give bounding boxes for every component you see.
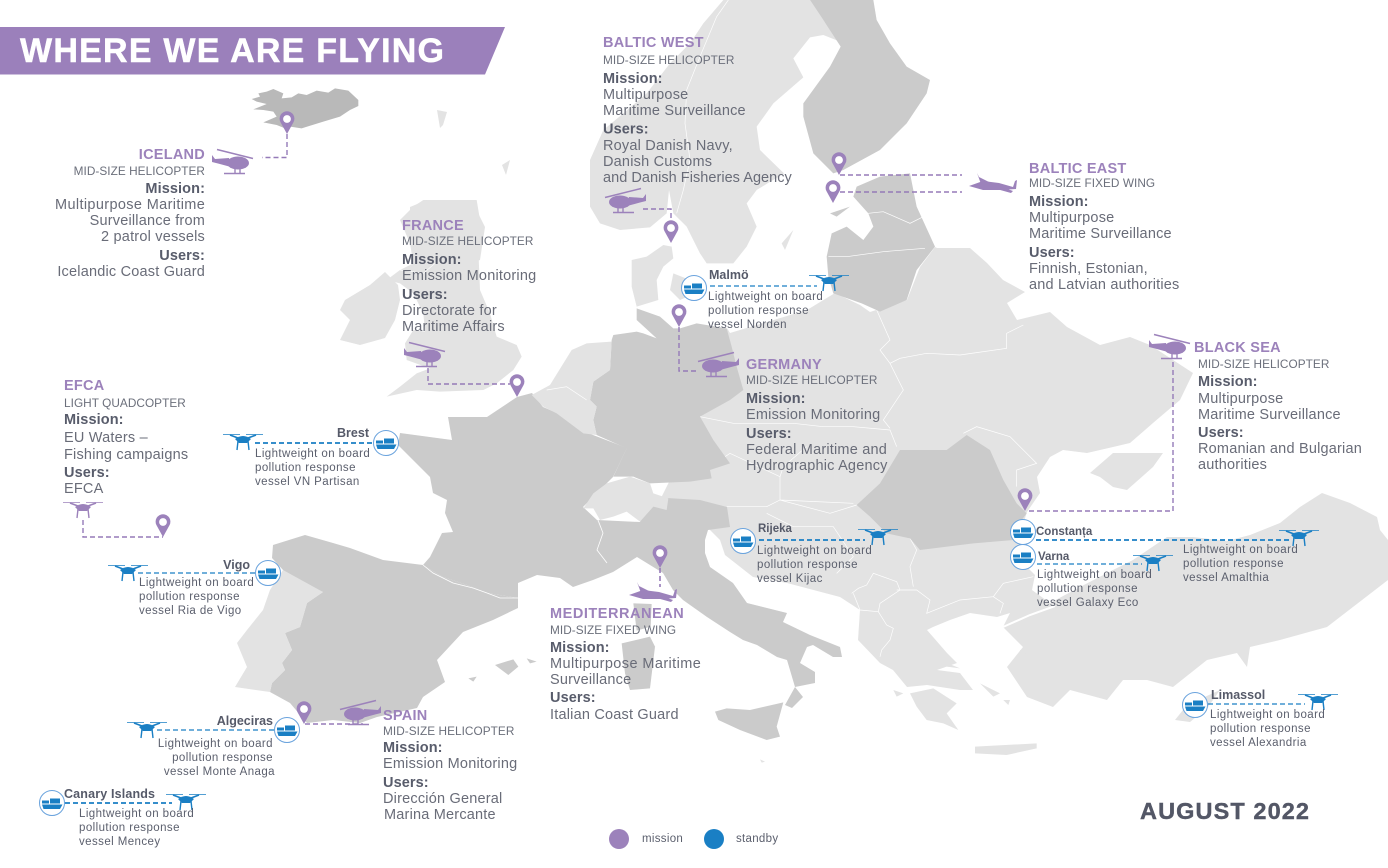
standby: Vigo: pollution response (139, 591, 240, 603)
location pins (156, 111, 1032, 724)
standby: Limassol (1210, 688, 1325, 749)
standby: Brest: Brest (337, 426, 370, 440)
panel: Germany: Users: (746, 426, 792, 442)
panel: Spain: MID-SIZE HELICOPTER (383, 724, 514, 738)
panel: Black Sea: authorities (1198, 457, 1267, 473)
map: Iceland (252, 88, 358, 128)
panel: Baltic West: Mission: (603, 71, 663, 87)
panel: Black Sea: Mission: (1198, 374, 1258, 390)
panel: Germany: GERMANY (746, 357, 822, 373)
panel: Baltic West: MID-SIZE HELICOPTER (603, 53, 734, 67)
panel: Spain (383, 708, 517, 823)
panel: EFCA: Users: (64, 465, 110, 481)
standby: Varna (1037, 551, 1152, 609)
standby: Constanța (1036, 526, 1298, 584)
panel: Germany: Hydrographic Agency (746, 458, 888, 474)
panel: Germany: Emission Monitoring (746, 407, 880, 423)
vessel icons (40, 276, 1208, 816)
panel: Baltic East: Mission: (1029, 194, 1089, 210)
panel: Mediterranean (550, 606, 701, 723)
standby: Rijeka: Rijeka (758, 523, 792, 535)
standby: Canary Islands: vessel Mencey (79, 836, 161, 848)
panel: Baltic West: Royal Danish Navy, (603, 138, 733, 154)
panel: France: Directorate for (402, 303, 497, 319)
panel: EFCA: Mission: (64, 412, 124, 428)
panel: Baltic East (1029, 161, 1180, 293)
panel: Iceland: Users: (159, 248, 205, 264)
standby: Canary Islands: pollution response (79, 822, 180, 834)
panel: Mediterranean: MID-SIZE FIXED WING (550, 623, 676, 637)
standby: Limassol: pollution response (1210, 723, 1311, 735)
standby: Brest: vessel VN Partisan (255, 476, 360, 488)
panel: France: MID-SIZE HELICOPTER (402, 234, 533, 248)
panel: Mediterranean: Mission: (550, 640, 610, 656)
panel: Black Sea (1194, 340, 1362, 473)
panel: Baltic West: Users: (603, 122, 649, 138)
standby: Malmö: pollution response (708, 305, 809, 317)
standby: Algeciras: vessel Monte Anaga (164, 766, 275, 778)
panel: Iceland: Surveillance from (90, 213, 205, 229)
panel: France: Mission: (402, 252, 462, 268)
standby: Constanța: vessel Amalthia (1183, 572, 1269, 584)
standby: Rijeka: vessel Kijac (757, 573, 823, 585)
panel: Baltic West: Danish Customs (603, 154, 712, 170)
legend: mission (642, 833, 683, 845)
panel: EFCA: Fishing campaigns (64, 447, 188, 463)
panel: Baltic West: BALTIC WEST (603, 35, 704, 51)
panel: Mediterranean: MEDITERRANEAN (550, 606, 684, 622)
panel: France (402, 218, 536, 335)
standby: Canary Islands (64, 787, 194, 848)
panel: Baltic East: MID-SIZE FIXED WING (1029, 176, 1155, 190)
standby: Limassol: vessel Alexandria (1210, 737, 1307, 749)
standby: Vigo (139, 558, 254, 617)
standby: Brest (255, 426, 370, 488)
panel: Iceland (55, 147, 205, 280)
standby: Varna: vessel Galaxy Eco (1037, 597, 1139, 609)
panel: Germany: Mission: (746, 391, 806, 407)
panel: Baltic East: Finnish, Estonian, (1029, 261, 1148, 277)
standby: Varna: Varna (1038, 551, 1070, 563)
legend (609, 829, 778, 849)
panel: EFCA (64, 378, 188, 497)
panel: Black Sea: Users: (1198, 425, 1244, 441)
dashed connector lines (65, 134, 1305, 803)
panel: Mediterranean: Multipurpose Maritime (550, 656, 701, 672)
standby: Constanța: Constanța (1036, 526, 1093, 538)
panel: EFCA: EFCA (64, 481, 104, 497)
standby: Rijeka: Lightweight on board (757, 545, 872, 557)
panel: France: Emission Monitoring (402, 268, 536, 284)
panel: Baltic East: BALTIC EAST (1029, 161, 1127, 177)
panel: France: Maritime Affairs (402, 319, 505, 335)
panel: EFCA: EFCA (64, 378, 105, 394)
map of Europe (235, 0, 1388, 763)
map: non-highlighted countries (340, 0, 1388, 763)
standby: Malmö (708, 268, 823, 331)
panel: Spain: SPAIN (383, 708, 428, 724)
standby: Brest: pollution response (255, 462, 356, 474)
title banner (0, 27, 505, 74)
panel: Mediterranean: Italian Coast Guard (550, 707, 679, 723)
panel: France: FRANCE (402, 218, 464, 234)
standby: Limassol: Limassol (1211, 688, 1265, 702)
panel: Spain: Emission Monitoring (383, 756, 517, 772)
panel: Mediterranean: Users: (550, 690, 596, 706)
title banner: WHERE WE ARE FLYING (20, 32, 444, 70)
panel: Black Sea: BLACK SEA (1194, 340, 1281, 356)
panel: Germany (746, 357, 888, 474)
panel: Germany: Federal Maritime and (746, 442, 887, 458)
panel: Black Sea: Romanian and Bulgarian (1198, 441, 1362, 457)
standby: Canary Islands: Canary Islands (64, 787, 155, 801)
panel: Spain: Mission: (383, 740, 443, 756)
panel: Baltic East: Users: (1029, 245, 1075, 261)
standby: Limassol: Lightweight on board (1210, 709, 1325, 721)
panel: Baltic West: Maritime Surveillance (603, 103, 746, 119)
panel: Iceland: Icelandic Coast Guard (57, 264, 205, 280)
standby: Malmö: Malmö (709, 268, 749, 282)
panel: France: Users: (402, 287, 448, 303)
standby: Malmö: vessel Norden (708, 319, 787, 331)
panel: EFCA: LIGHT QUADCOPTER (64, 396, 186, 410)
standby: Vigo: vessel Ria de Vigo (139, 605, 242, 617)
standby: Varna: Lightweight on board (1037, 569, 1152, 581)
panel: Baltic West (603, 35, 793, 186)
standby: Algeciras (158, 714, 275, 778)
panel: Mediterranean: Surveillance (550, 672, 631, 688)
panel: Baltic East: Multipurpose (1029, 210, 1114, 226)
standby: Vigo: Vigo (223, 558, 250, 572)
panel: Spain: Marina Mercante (384, 807, 496, 823)
panel: Iceland: 2 patrol vessels (101, 229, 205, 245)
panel: Black Sea: Maritime Surveillance (1198, 407, 1341, 423)
standby: Algeciras: pollution response (172, 752, 273, 764)
standby: Vigo: Lightweight on board (139, 577, 254, 589)
panel: Iceland: Mission: (145, 181, 205, 197)
panel: Spain: Dirección General (383, 791, 502, 807)
panel: Black Sea: Multipurpose (1198, 391, 1283, 407)
standby: Canary Islands: Lightweight on board (79, 808, 194, 820)
helicopter icons (212, 150, 1190, 724)
panel: Baltic East: and Latvian authorities (1029, 277, 1180, 293)
standby: Constanța: pollution response (1183, 558, 1284, 570)
panel: Black Sea: MID-SIZE HELICOPTER (1198, 357, 1329, 371)
standby: Rijeka: pollution response (757, 559, 858, 571)
panel: Iceland: MID-SIZE HELICOPTER (74, 164, 205, 178)
standby: Varna: pollution response (1037, 583, 1138, 595)
standby: Algeciras: Lightweight on board (158, 738, 273, 750)
panel: Baltic West: Multipurpose (603, 87, 688, 103)
standby: Rijeka (757, 523, 872, 585)
standby: Brest: Lightweight on board (255, 448, 370, 460)
fixed wing icons (629, 173, 1017, 602)
date: AUGUST 2022 (1140, 798, 1309, 824)
legend: standby (736, 833, 778, 845)
standby: Malmö: Lightweight on board (708, 291, 823, 303)
panel: EFCA: EU Waters – (64, 430, 149, 446)
panel: Spain: Users: (383, 775, 429, 791)
standby: Algeciras: Algeciras (217, 714, 273, 728)
standby: Constanța: Lightweight on board (1183, 544, 1298, 556)
panel: Baltic East: Maritime Surveillance (1029, 226, 1172, 242)
panel: Iceland: Multipurpose Maritime (55, 197, 205, 213)
panel: Baltic West: and Danish Fisheries Agency (603, 170, 793, 186)
panel: Iceland: ICELAND (139, 147, 205, 163)
map: highlighted countries (235, 0, 1027, 740)
drone icons (63, 276, 1338, 810)
panel: Germany: MID-SIZE HELICOPTER (746, 373, 877, 387)
